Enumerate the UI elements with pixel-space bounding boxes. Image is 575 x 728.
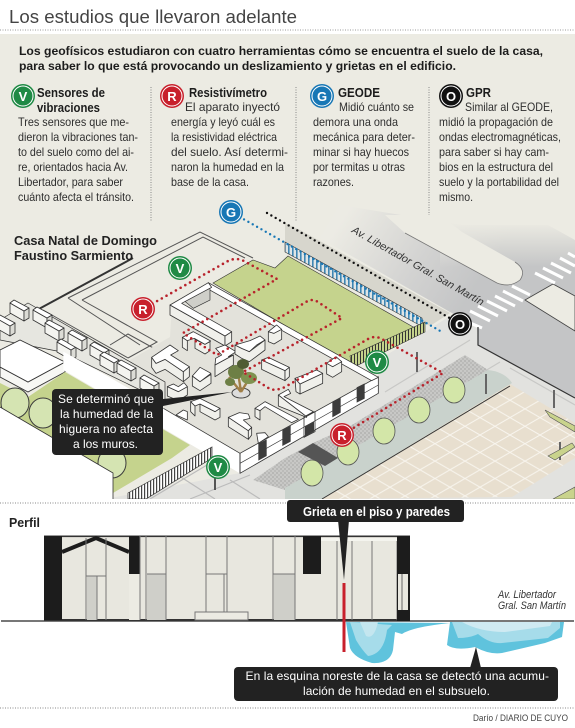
tool column: GPR: mismo.: [439, 190, 473, 204]
tool column: sensores de vibraciones: Libertador, para saber: [18, 175, 123, 189]
callout: humedad: lación de humedad en el subsuelo.: [303, 684, 490, 698]
marker: G: G: [226, 205, 236, 220]
walkway: [285, 370, 512, 499]
callout: higuera: higuera no afecta: [59, 422, 153, 436]
room 15: [278, 395, 307, 417]
tool column: GPR: para saber si hay cam-: [439, 145, 549, 159]
room 16: [257, 433, 268, 443]
room 2: [182, 337, 187, 351]
callout: humedad: En la esquina noreste de la casa se detectó una acumu-: [246, 669, 549, 683]
building floor: [130, 283, 378, 453]
room 7: [235, 340, 265, 362]
room 4: [192, 374, 211, 391]
profile heading: Perfil: [9, 515, 40, 530]
road: [320, 205, 575, 398]
pavement ground: [100, 316, 575, 500]
entrance fence: [128, 447, 212, 499]
room 14: [255, 408, 260, 420]
fig tree: [225, 359, 257, 398]
tool column: resistivímetro: la resistividad eléctrica: [171, 130, 277, 144]
tool column: sensores de vibraciones: re, orientados hacia Av.: [18, 160, 128, 174]
callout: higuera: [52, 389, 232, 455]
tool column: GPR: bios en la estructura del: [439, 160, 553, 174]
tool column: GEODE: Midió cuánto se: [339, 100, 414, 114]
marker: V east: [365, 350, 389, 374]
red resistivity route: [143, 259, 443, 435]
garden lawn: [213, 256, 415, 365]
map background panel: [0, 34, 575, 499]
tool column: GEODE: GEODE: [338, 85, 380, 100]
room 5: [167, 387, 187, 401]
tool column: GPR: Similar al GEODE,: [465, 100, 553, 114]
tool column: GPR: GPR: [466, 85, 491, 100]
intro text: [19, 44, 543, 73]
plaza benches: [545, 410, 575, 499]
icon: O marker: O: [446, 89, 456, 104]
callout: higuera: a los muros.: [73, 437, 138, 451]
marker: R south: R: [337, 428, 347, 443]
room 8: [262, 360, 285, 381]
room 10: [268, 329, 282, 344]
intro text: Los geofísicos estudiaron con cuatro herramientas cómo se encuentra el suelo de la casa,: [19, 44, 543, 58]
granular pavement: [253, 355, 488, 490]
tool column: resistivímetro: base de la casa.: [171, 175, 249, 189]
blue GEODE route: [231, 212, 442, 332]
tool column: resistivímetro: energía y leyó cuál es: [171, 115, 275, 129]
tool column: sensores de vibraciones: to del suelo como del ai-: [18, 145, 134, 159]
site outlines: [37, 232, 253, 358]
tool column: sensores de vibraciones: cuánto afecta el tránsito.: [18, 190, 134, 204]
marker: V north: [168, 256, 192, 280]
callout: higuera: Se determinó que: [58, 392, 154, 406]
callout: grieta: [287, 500, 464, 580]
icon: V marker: V: [19, 89, 28, 104]
tool column: sensores de vibraciones: Sensores de: [37, 85, 105, 100]
fence: garden: [350, 322, 425, 368]
dark ramp: [298, 443, 338, 466]
tool column: resistivímetro: del suelo. Así determi-: [171, 145, 288, 159]
black GPR route: [267, 213, 460, 324]
trees on the walkway: [301, 377, 465, 486]
tool column: GEODE: [310, 84, 415, 189]
lawn front: [0, 372, 190, 493]
tool column: sensores de vibraciones: vibraciones: [37, 100, 100, 115]
marker: O: [448, 312, 472, 336]
ground line: [1, 620, 574, 622]
trees left: [1, 388, 126, 478]
tool column: GEODE: por termitas u otras: [313, 160, 405, 174]
callout: humedad: [234, 647, 558, 701]
marker: G: [219, 200, 243, 224]
building elevation: [44, 536, 410, 621]
room 12: [191, 402, 195, 416]
marker: O: O: [455, 317, 465, 332]
avenue label profile: Av. Libertador: [497, 589, 557, 601]
room 3: [152, 357, 183, 382]
marker: R west: R: [138, 302, 148, 317]
tool column: sensores de vibraciones: Tres sensores que me-: [18, 115, 129, 129]
marker: R west: [131, 297, 155, 321]
Casa Natal heading: Casa Natal de Domingo: [14, 233, 157, 248]
title: Los estudios que llevaron adelante: [9, 6, 297, 27]
profile section: [1, 500, 574, 701]
Casa Natal heading: Faustino Sarmiento: [14, 248, 133, 263]
room 11: [327, 362, 342, 377]
callout: grieta: Grieta en el piso y paredes: [303, 505, 450, 519]
tool column: GEODE: mecánica para deter-: [313, 130, 415, 144]
tool column: resistivímetro: El aparato inyectó: [185, 100, 280, 114]
tool column: GEODE: demora una onda: [313, 115, 398, 129]
fence: blue: [285, 242, 423, 327]
crosswalk: [468, 253, 575, 328]
tool column: GPR: ondas electromagnéticas,: [439, 130, 561, 144]
avenue label: Av. Libertador Gral. San Martín: [349, 224, 486, 309]
icon: G marker: G: [317, 89, 327, 104]
callout: higuera: la humedad de la: [60, 407, 153, 421]
marker: V east: V: [373, 355, 382, 370]
room 9: [300, 373, 323, 394]
marker: V north: V: [176, 261, 185, 276]
left rooms: [0, 300, 165, 402]
long wall: [205, 283, 378, 381]
marker: V south: [206, 455, 230, 490]
tool column: GEODE: razones.: [313, 175, 354, 189]
tool column: GPR: midió la propagación de: [439, 115, 553, 129]
sidewalk strip along avenue: [285, 223, 450, 326]
room 6: [215, 355, 233, 377]
isometric map: [0, 200, 575, 500]
marker: V south: V: [214, 460, 223, 475]
front wall left: [63, 352, 240, 473]
building blocks and walls: [63, 283, 378, 473]
tool column: resistivímetro: naron la humedad en la: [171, 160, 284, 174]
windows: [258, 383, 365, 461]
tool column: GPR: [439, 84, 561, 204]
crack line: [342, 583, 346, 652]
water accumulation: left: [345, 622, 450, 663]
U block: [183, 288, 210, 308]
icon: R marker: R: [167, 89, 177, 104]
plaza tiles: [322, 384, 575, 499]
tool column: GEODE: minar si hay huecos: [313, 145, 409, 159]
intro text: para saber lo que está provocando un deslizamiento y grietas en el edificio.: [19, 59, 456, 73]
room 13: [228, 417, 248, 439]
marker: R south: [330, 423, 354, 447]
tool column: resistivímetro: Resistivímetro: [189, 85, 267, 100]
tool column: GPR: suelo y la portabilidad del: [439, 175, 559, 189]
tool column: sensores de vibraciones: [11, 84, 138, 204]
Casa Natal heading: [14, 233, 157, 263]
tool column: resistivímetro: [160, 84, 288, 189]
avenue label profile: [497, 589, 566, 612]
tool column: sensores de vibraciones: dieron la vibraciones tan-: [18, 130, 138, 144]
water accumulation: right: [447, 622, 564, 653]
white block left: [0, 340, 65, 392]
street posts: [417, 352, 560, 460]
white foreground block: [0, 407, 113, 500]
front wall right: [240, 377, 378, 473]
